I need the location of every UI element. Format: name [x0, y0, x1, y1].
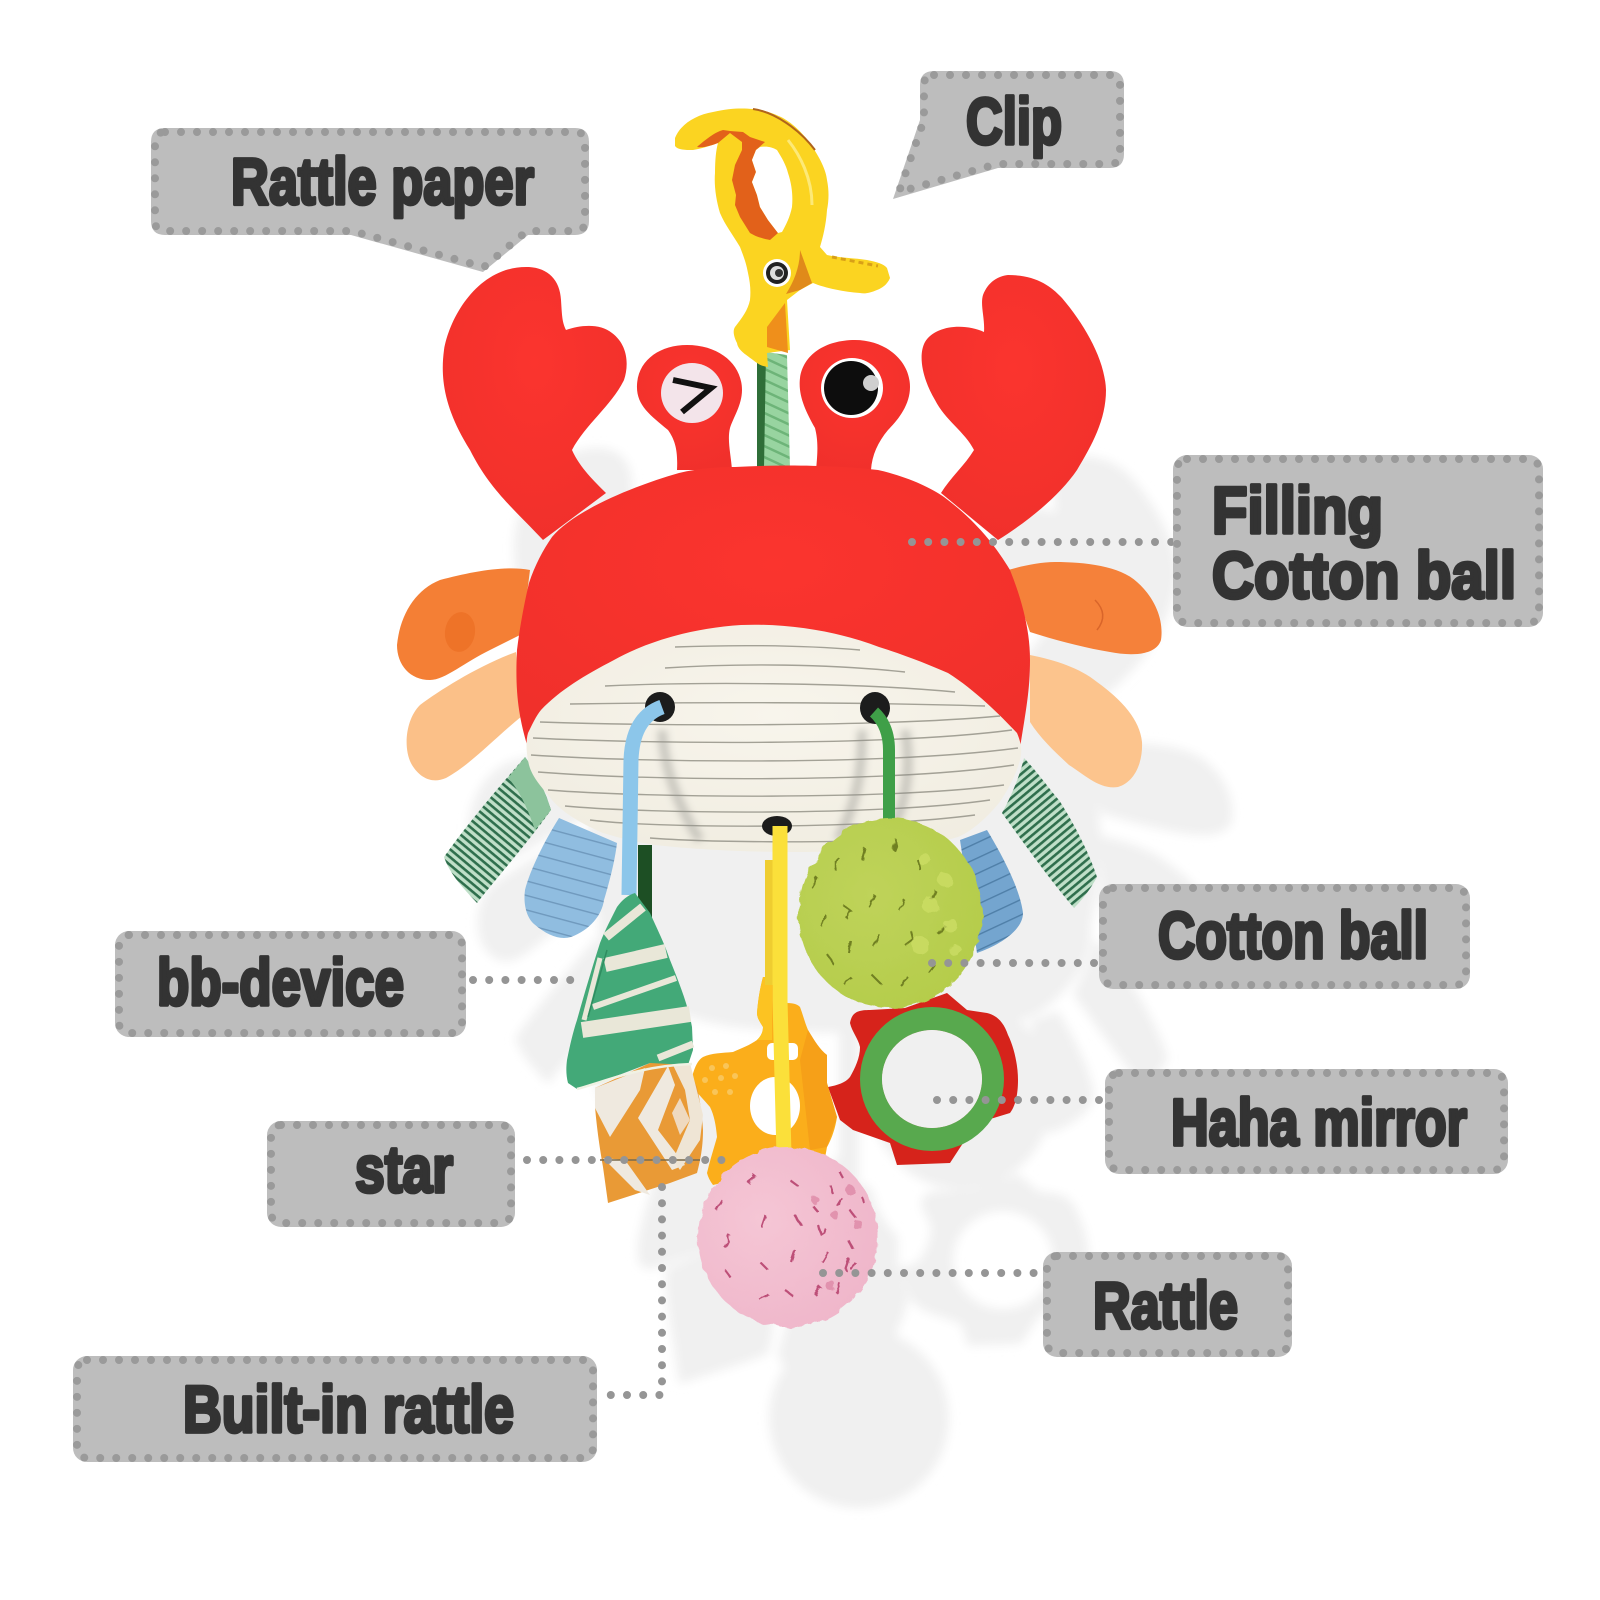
label: Filling Cotton ball: Filling [1212, 473, 1383, 547]
red mirror ring [828, 993, 1018, 1165]
crab toy illustration [397, 108, 1162, 1327]
label: Built-in rattle: Built-in rattle [183, 1372, 514, 1446]
yellow string [769, 826, 784, 1155]
label: star [267, 1121, 515, 1227]
green mirror frame [860, 1007, 1004, 1151]
green ribbon [757, 352, 790, 468]
lime cotton ball [798, 818, 982, 1008]
left eye stalk [637, 345, 742, 470]
label: Cotton ball [1099, 884, 1470, 989]
orange packet [595, 1063, 703, 1203]
green string [874, 712, 889, 825]
green striped pyramid [566, 893, 693, 1089]
label: Filling Cotton ball: Cotton ball [1212, 538, 1516, 612]
right eye stalk [800, 340, 910, 470]
leader line: star [527, 1156, 737, 1164]
blue string [629, 707, 662, 895]
pink rattle ball [698, 1147, 878, 1327]
left flaps [397, 568, 617, 938]
left claw [443, 267, 627, 540]
leader line: built-in rattle [597, 1187, 662, 1395]
leader line: haha mirror [937, 1096, 1105, 1104]
label: star: star [355, 1132, 453, 1206]
label: Cotton ball: Cotton ball [1158, 898, 1428, 972]
leader line: filling cotton ball [912, 538, 1173, 546]
red shell [516, 466, 1030, 748]
label: bb-device: bb-device [157, 945, 404, 1019]
dark green strap [638, 845, 652, 920]
label: Rattle: Rattle [1093, 1268, 1238, 1342]
right claw [922, 275, 1106, 540]
mirror surface [882, 1030, 982, 1128]
icon: yellow clip [675, 108, 890, 367]
label: Clip: Clip [966, 84, 1062, 158]
label: Built-in rattle [73, 1356, 597, 1462]
label: Haha mirror: Haha mirror [1171, 1085, 1467, 1159]
label: Rattle [1043, 1252, 1292, 1357]
leader line: rattle [823, 1269, 1043, 1277]
label: Rattle paper [151, 128, 589, 272]
background: soft grey ghost shadow of the toy [468, 448, 1233, 1508]
label: Rattle paper: Rattle paper [231, 144, 534, 218]
right flaps [960, 562, 1162, 953]
label: Clip [893, 71, 1124, 199]
star teether [692, 977, 837, 1185]
label: Filling Cotton ball [1173, 455, 1543, 627]
label: Haha mirror [1105, 1069, 1508, 1174]
string holes [645, 692, 890, 836]
leader line: cotton ball [932, 959, 1099, 967]
leader line: bb-device [473, 976, 572, 984]
cream striped belly [526, 625, 1021, 852]
label: bb-device [115, 931, 466, 1037]
